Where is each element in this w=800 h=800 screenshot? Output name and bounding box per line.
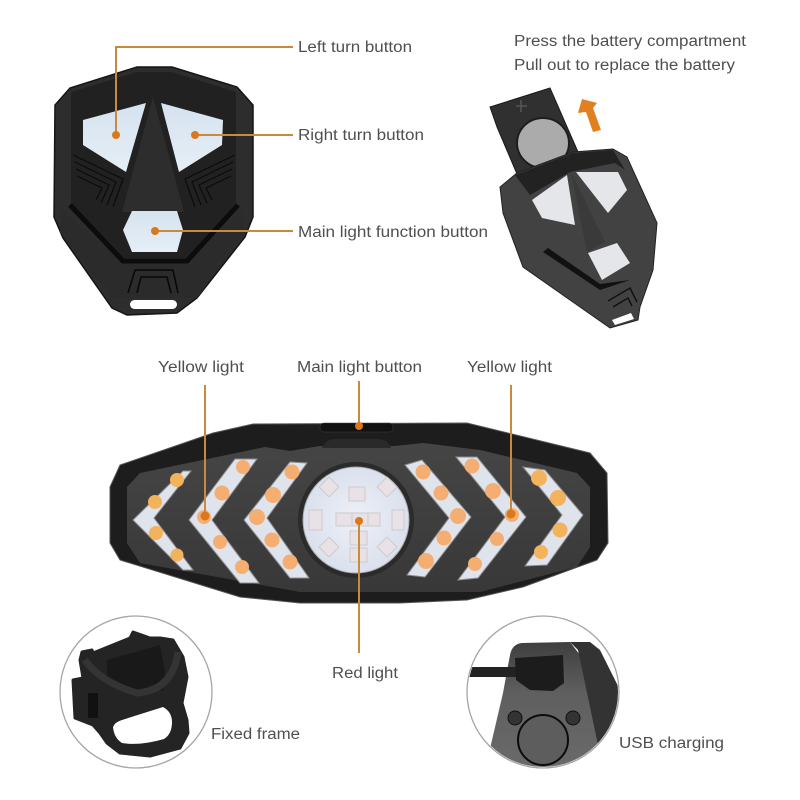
inset: fixed frame — [60, 616, 212, 768]
tilted remote ridge — [571, 172, 605, 252]
label: fixed frame: Fixed frame — [211, 726, 300, 743]
right chevron LEDs — [416, 458, 568, 571]
battery instruction text: Pull out to replace the battery — [514, 57, 735, 74]
inset: USB charging — [465, 616, 625, 770]
bracket band — [85, 652, 178, 693]
usb cable — [470, 667, 516, 677]
charging port detail — [465, 642, 625, 770]
remote control front view — [54, 67, 253, 315]
lens LEDs — [309, 477, 404, 562]
label: main light function button: Main light function button — [298, 224, 488, 241]
light outer body — [110, 423, 608, 603]
right turn button — [161, 103, 223, 172]
remote dark V band — [70, 205, 238, 261]
battery tray — [490, 88, 578, 174]
device side panel — [570, 642, 618, 744]
device body — [490, 642, 600, 767]
right chevrons — [405, 457, 583, 580]
label: USB charging: USB charging — [619, 735, 724, 752]
battery instruction text: Press the battery compartment — [514, 33, 747, 50]
tail light callout lines — [200, 381, 516, 653]
tilted remote lower band — [543, 248, 630, 290]
left chevrons — [133, 459, 309, 583]
inset circle — [467, 616, 619, 768]
battery mesh — [517, 118, 569, 168]
main tail light — [110, 423, 608, 603]
infographic canvas — [53, 34, 746, 769]
remote body — [54, 67, 253, 315]
plus mark — [516, 100, 527, 112]
remote with battery tray open — [490, 88, 657, 328]
tilted remote body — [500, 149, 657, 328]
screws — [508, 711, 522, 725]
left turn button — [83, 103, 146, 172]
usb plug — [515, 655, 564, 691]
tilted main button — [588, 243, 630, 280]
white lens — [303, 467, 409, 573]
remote inner face — [71, 72, 236, 258]
label: left yellow light: Yellow light — [158, 359, 245, 376]
remote lower bevel — [60, 210, 245, 298]
label: right yellow light: Yellow light — [467, 359, 553, 376]
remote side ribs — [73, 155, 123, 207]
tilted logo — [608, 288, 637, 307]
main light function button — [123, 211, 183, 252]
label: main light button: Main light button — [297, 359, 422, 376]
bracket side clip — [88, 693, 98, 718]
tilted slot — [612, 313, 634, 325]
remote centre ridge — [122, 97, 184, 212]
power button — [518, 715, 568, 765]
bracket back plate — [107, 645, 165, 692]
light inner panel — [127, 443, 590, 592]
light top button — [320, 423, 393, 432]
label: right turn button: Right turn button — [298, 127, 424, 144]
remote bottom logo — [128, 270, 178, 293]
inset circle — [60, 616, 212, 768]
lanyard slot — [130, 300, 177, 309]
label: red light: Red light — [332, 665, 399, 682]
centre lens surround — [298, 462, 414, 578]
top bump — [322, 439, 391, 448]
battery instruction text — [514, 33, 747, 74]
remote callout lines — [112, 47, 293, 235]
orange pull-out arrow — [578, 99, 601, 132]
bracket body — [73, 632, 188, 756]
label: left turn button: Left turn button — [298, 39, 412, 56]
left chevron LEDs — [148, 460, 300, 574]
tilted left button — [532, 175, 575, 225]
tilted remote top band — [515, 150, 625, 195]
tilted right button — [576, 172, 627, 213]
bracket opening — [113, 707, 172, 744]
